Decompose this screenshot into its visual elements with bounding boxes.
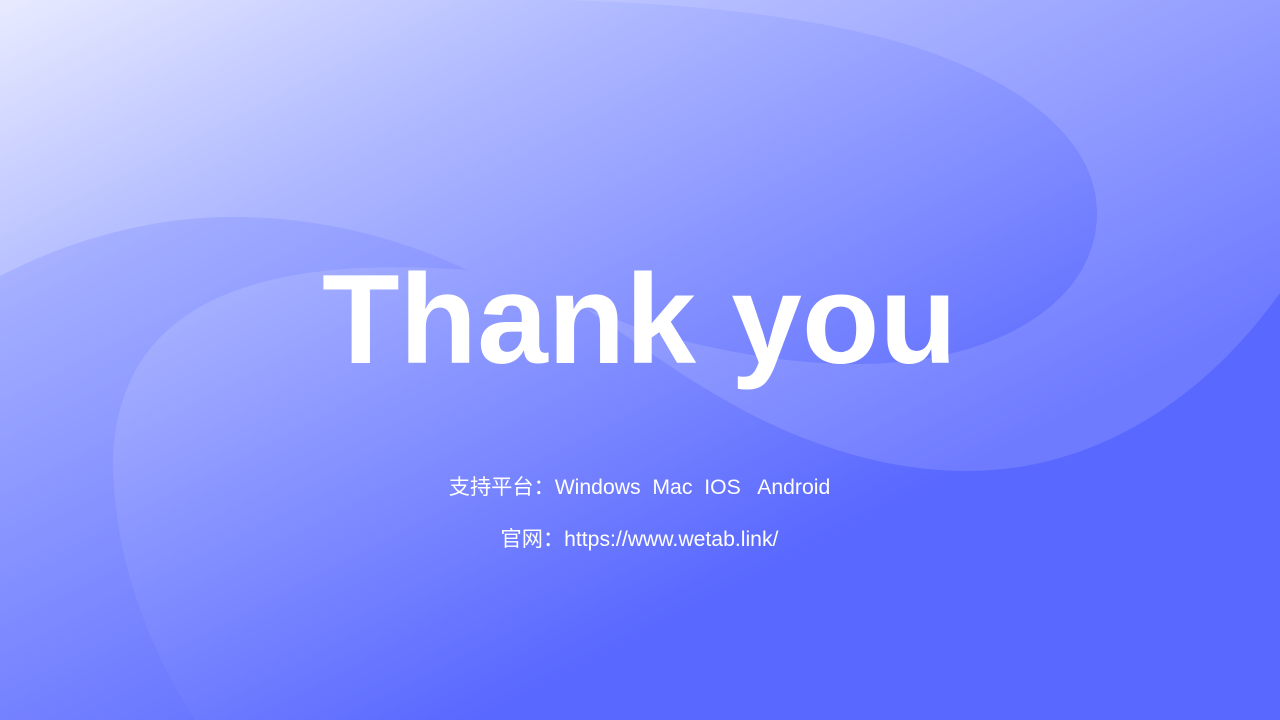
website text: 官网：https://www.wetab.link/ xyxy=(501,528,778,551)
title: Thank you xyxy=(322,248,957,390)
supported platforms text: 支持平台：Windows Mac IOS Android xyxy=(449,476,830,499)
